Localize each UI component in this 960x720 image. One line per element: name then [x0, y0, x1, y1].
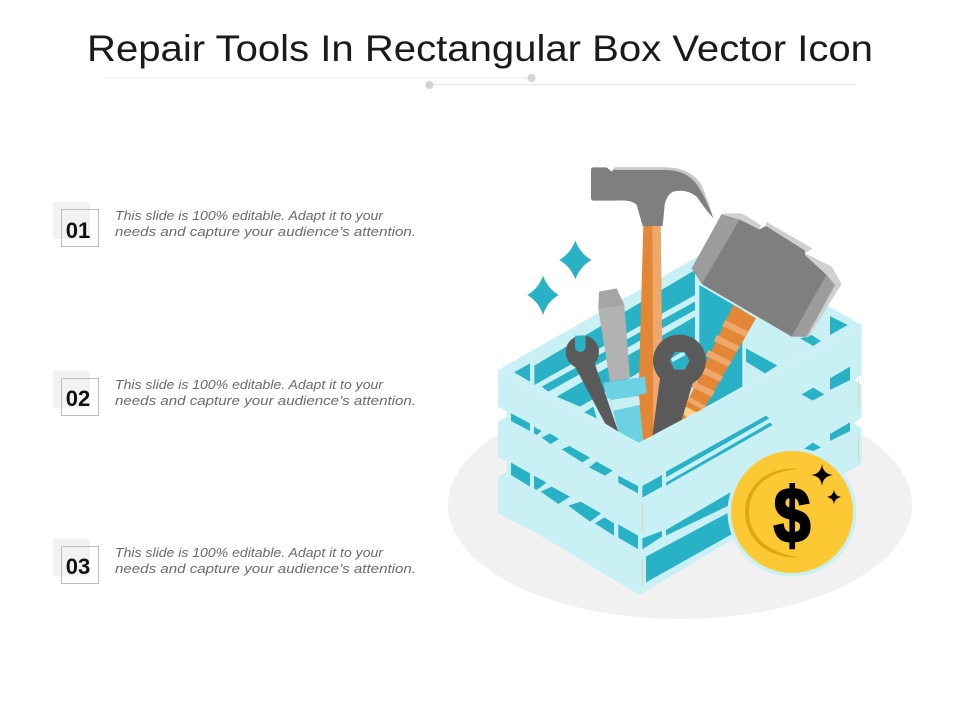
coin with dollar sign: [728, 448, 856, 576]
ground ellipse: [448, 391, 912, 619]
title: Repair Tools In Rectangular Box Vector Icon: [87, 28, 873, 69]
list item 01: needs and capture your audience’s attention.: [115, 224, 416, 239]
crate left face gaps: [511, 413, 638, 549]
list item 03: [53, 539, 416, 584]
crate front rim highlights: [500, 327, 858, 443]
tools: [566, 167, 842, 443]
crate body: [498, 244, 862, 595]
icon: sparkle diamonds: [527, 241, 591, 315]
crate right side gaps: [802, 367, 850, 452]
list item 03: 03: [66, 554, 90, 579]
list item 02: This slide is 100% editable. Adapt it to your: [115, 377, 384, 392]
list item 02: needs and capture your audience’s attention.: [115, 393, 416, 408]
list item 01: 01: [66, 218, 90, 243]
crate front right gaps: [642, 416, 773, 582]
list item 01: [53, 202, 416, 246]
list item 01: This slide is 100% editable. Adapt it to your: [115, 208, 384, 223]
open-end wrench: [566, 335, 618, 432]
screwdriver: [598, 288, 647, 443]
claw hammer handle: [638, 226, 663, 441]
crate interior slats: [514, 270, 848, 418]
list item 03: needs and capture your audience’s attention.: [115, 561, 416, 576]
title divider with dots: [105, 74, 856, 89]
icon: coin stars: [811, 464, 841, 504]
ring wrench: [652, 335, 706, 436]
mallet handle: [682, 305, 756, 420]
list item 03: This slide is 100% editable. Adapt it to your: [115, 545, 384, 560]
crate: [498, 244, 862, 595]
dollar sign: $: [774, 472, 810, 559]
list item 02: 02: [66, 386, 90, 411]
mallet head: [692, 213, 842, 337]
crate corner accents: [643, 379, 859, 586]
list item 02: [53, 371, 416, 416]
claw hammer head: [591, 167, 713, 226]
